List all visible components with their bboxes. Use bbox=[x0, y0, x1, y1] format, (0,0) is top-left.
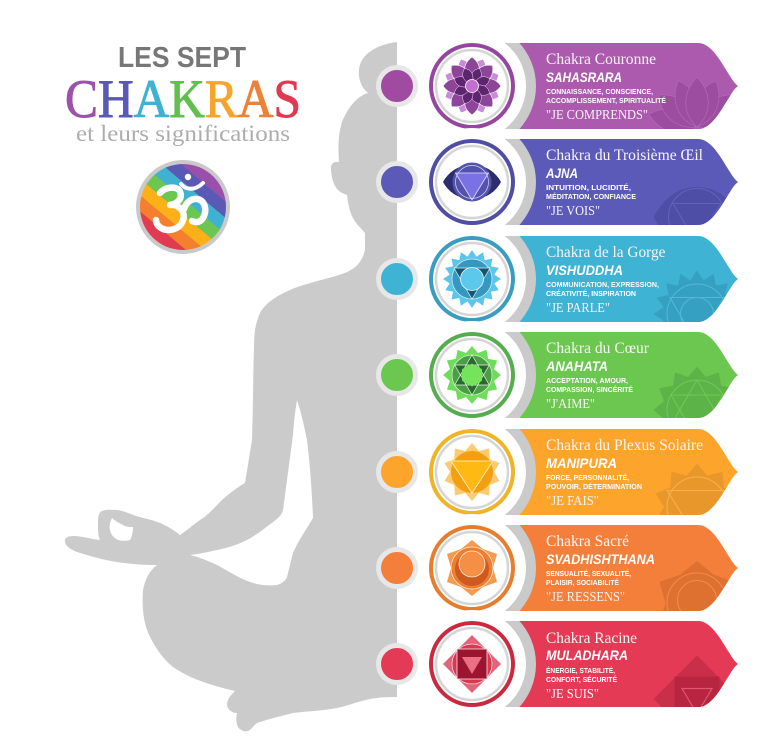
icon: muladhara bbox=[431, 623, 513, 705]
text: svadhishthana: "JE RESSENS" bbox=[546, 589, 625, 604]
text: svadhishthana bbox=[546, 533, 655, 604]
chakra row: Anahata bbox=[429, 321, 738, 418]
icon: ajna eye bbox=[431, 141, 513, 223]
text: ajna: AJNA bbox=[545, 165, 578, 181]
text: sahasrara: CONNAISSANCE, CONSCIENCE, bbox=[546, 87, 653, 96]
chakra row: Muladhara bbox=[429, 610, 738, 707]
text: svadhishthana: Chakra Sacré bbox=[546, 533, 629, 550]
body markers: coloured dots bbox=[378, 68, 416, 682]
text: muladhara: CONFORT, SÉCURITÉ bbox=[546, 675, 617, 684]
text: muladhara: ÉNERGIE, STABILITÉ, bbox=[546, 666, 615, 675]
text: ajna: Chakra du Troisième Œil bbox=[546, 147, 704, 164]
icon: vishuddha bbox=[431, 238, 513, 320]
title: les sept: LES SEPT bbox=[118, 42, 246, 74]
text: vishuddha: Chakra de la Gorge bbox=[546, 244, 666, 261]
watermark: heart chakra bbox=[654, 366, 729, 418]
chakra row: Ajna bbox=[429, 128, 738, 225]
text: sahasrara: "JE COMPRENDS" bbox=[546, 107, 648, 122]
chakra row: Manipura bbox=[429, 429, 738, 515]
watermark: lotus bbox=[648, 77, 731, 129]
title: chakras: CHAKRAS bbox=[65, 69, 301, 129]
text: anahata: ACCEPTATION, AMOUR, bbox=[546, 376, 628, 385]
icon: manipura bbox=[431, 431, 513, 513]
text: manipura bbox=[546, 437, 703, 508]
text: anahata: "J'AIME" bbox=[546, 396, 595, 411]
text: sahasrara bbox=[546, 51, 666, 122]
text: sahasrara: Chakra Couronne bbox=[546, 51, 656, 68]
text: ajna: MÉDITATION, CONFIANCE bbox=[546, 192, 636, 201]
watermark: root chakra bbox=[654, 656, 724, 707]
text: vishuddha: "JE PARLE" bbox=[546, 300, 610, 315]
text: anahata bbox=[545, 340, 650, 411]
text: sahasrara: ACCOMPLISSEMENT, SPIRITUALITÉ bbox=[546, 96, 666, 105]
text: manipura: "JE FAIS" bbox=[546, 493, 599, 508]
watermark: solar plexus bbox=[656, 464, 726, 515]
text: anahata: Chakra du Cœur bbox=[546, 340, 650, 357]
watermark: third eye bbox=[654, 187, 726, 225]
subtitle: et leurs significations bbox=[76, 121, 290, 146]
text: svadhishthana: PLAISIR, SOCIABILITÉ bbox=[546, 578, 619, 587]
text: manipura: POUVOIR, DÉTERMINATION bbox=[546, 482, 642, 491]
text: anahata: ANAHATA bbox=[545, 358, 608, 374]
icon: anahata bbox=[431, 334, 513, 416]
text: vishuddha: COMMUNICATION, EXPRESSION, bbox=[546, 280, 659, 289]
text: vishuddha: VISHUDDHA bbox=[546, 262, 623, 278]
text: vishuddha: CRÉATIVITÉ, INSPIRATION bbox=[546, 289, 636, 298]
text: muladhara: Chakra Racine bbox=[546, 630, 637, 647]
text: muladhara: MULADHARA bbox=[546, 647, 628, 663]
chakra row: Svadhishthana bbox=[429, 514, 738, 611]
icon: rainbow om badge bbox=[136, 160, 230, 254]
icon: sahasrara lotus bbox=[431, 45, 513, 127]
chakra row: Vishuddha bbox=[429, 236, 738, 322]
watermark: throat chakra bbox=[654, 271, 728, 322]
text: manipura: Chakra du Plexus Solaire bbox=[546, 437, 703, 454]
icon: svadhishthana bbox=[431, 527, 513, 609]
text: manipura: FORCE, PERSONNALITÉ, bbox=[546, 473, 629, 482]
text: svadhishthana: SVADHISHTHANA bbox=[546, 551, 655, 567]
text: ajna: INTUITION, LUCIDITÉ, bbox=[546, 183, 631, 192]
text: ajna bbox=[545, 147, 704, 218]
text: manipura: MANIPURA bbox=[546, 455, 617, 471]
text: vishuddha bbox=[546, 244, 666, 315]
chakra row: Sahasrara bbox=[429, 43, 738, 129]
text: muladhara bbox=[546, 630, 637, 701]
text: ajna: "JE VOIS" bbox=[546, 203, 600, 218]
text: anahata: COMPASSION, SINCÉRITÉ bbox=[546, 385, 633, 394]
text: svadhishthana: SENSUALITÉ, SEXUALITÉ, bbox=[546, 569, 631, 578]
silhouette: meditating figure bbox=[65, 42, 397, 731]
text: muladhara: "JE SUIS" bbox=[546, 686, 599, 701]
watermark: sacral chakra bbox=[660, 561, 729, 611]
text: sahasrara: SAHASRARA bbox=[546, 69, 622, 85]
